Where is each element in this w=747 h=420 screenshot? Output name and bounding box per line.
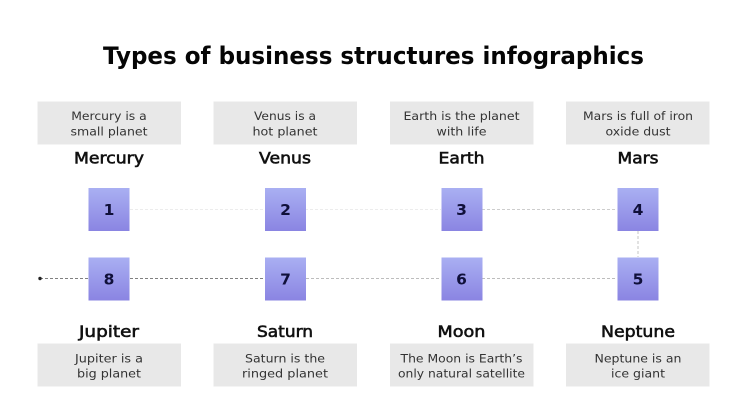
number 2: 2 <box>280 201 291 219</box>
number 7: 7 <box>280 270 291 288</box>
connector: 6 to 7 <box>306 278 441 280</box>
description box: Mars <box>566 102 710 144</box>
description box: Neptune: ice giant <box>611 366 666 380</box>
heading: Neptune: Neptune <box>601 322 675 341</box>
heading: Earth: Earth <box>438 148 484 168</box>
description box: Moon: only natural satellite <box>398 366 525 380</box>
number 3 <box>442 188 482 231</box>
connector: 5 to 6 <box>482 278 617 280</box>
panel: Venus <box>214 102 357 231</box>
number 4: 4 <box>633 201 644 219</box>
number 6 <box>442 258 482 300</box>
number 1: 1 <box>104 201 114 219</box>
description box: Earth: Earth is the planet <box>404 109 520 123</box>
description box: Neptune <box>566 344 710 386</box>
description box: Mercury: Mercury is a <box>71 109 147 123</box>
connector: 4 to 5 <box>637 231 639 257</box>
description box: Mercury <box>38 102 181 144</box>
number 1 <box>88 188 130 231</box>
number 5 <box>618 258 658 300</box>
description box: Saturn: Saturn is the <box>245 352 325 366</box>
connector: 3 to 4 <box>482 208 617 210</box>
number 6: 6 <box>456 270 467 288</box>
connector: 8 to end dot <box>38 277 89 280</box>
panel: Jupiter <box>38 258 181 386</box>
panel: Saturn <box>214 258 357 386</box>
description box: Moon <box>390 344 534 386</box>
panel: Mercury <box>38 102 181 231</box>
connector: 1 to 2 to 3 <box>130 208 441 210</box>
description box: Earth: with life <box>436 124 486 138</box>
number 4 <box>618 188 658 231</box>
connector: 7 to 8 <box>130 278 265 280</box>
description box: Earth <box>390 102 534 144</box>
number 8: 8 <box>104 270 114 288</box>
heading: Mercury: Mercury <box>74 148 144 168</box>
description box: Moon: The Moon is Earth’s <box>399 352 523 366</box>
number 5: 5 <box>633 270 643 288</box>
description box: Saturn <box>214 344 357 386</box>
heading: Mars: Mars <box>618 148 658 168</box>
heading: Jupiter: Jupiter <box>78 322 139 341</box>
title: Types of business structures infographics <box>103 42 644 70</box>
number 7 <box>265 258 306 300</box>
heading: Venus: Venus <box>259 148 311 168</box>
description box: Venus: hot planet <box>252 124 318 138</box>
description box: Saturn: ringed planet <box>242 366 329 380</box>
description box: Jupiter: Jupiter is a <box>74 352 143 366</box>
description box: Jupiter: big planet <box>77 366 142 380</box>
panel: Neptune <box>566 258 710 386</box>
description box: Mars: oxide dust <box>606 124 671 138</box>
description box: Mercury: small planet <box>70 124 148 138</box>
number 3: 3 <box>456 201 467 219</box>
number 2 <box>265 188 306 231</box>
heading: Moon: Moon <box>438 322 486 341</box>
description box: Mars: Mars is full of iron <box>583 109 693 123</box>
description box: Neptune: Neptune is an <box>594 352 682 366</box>
heading: Saturn: Saturn <box>257 322 313 341</box>
description box: Venus: Venus is a <box>254 109 316 123</box>
panel: Moon <box>390 258 534 386</box>
panel: Earth <box>390 102 534 231</box>
description box: Venus <box>214 102 357 144</box>
description box: Jupiter <box>38 344 181 386</box>
number 8 <box>88 258 130 300</box>
panel: Mars <box>566 102 710 231</box>
